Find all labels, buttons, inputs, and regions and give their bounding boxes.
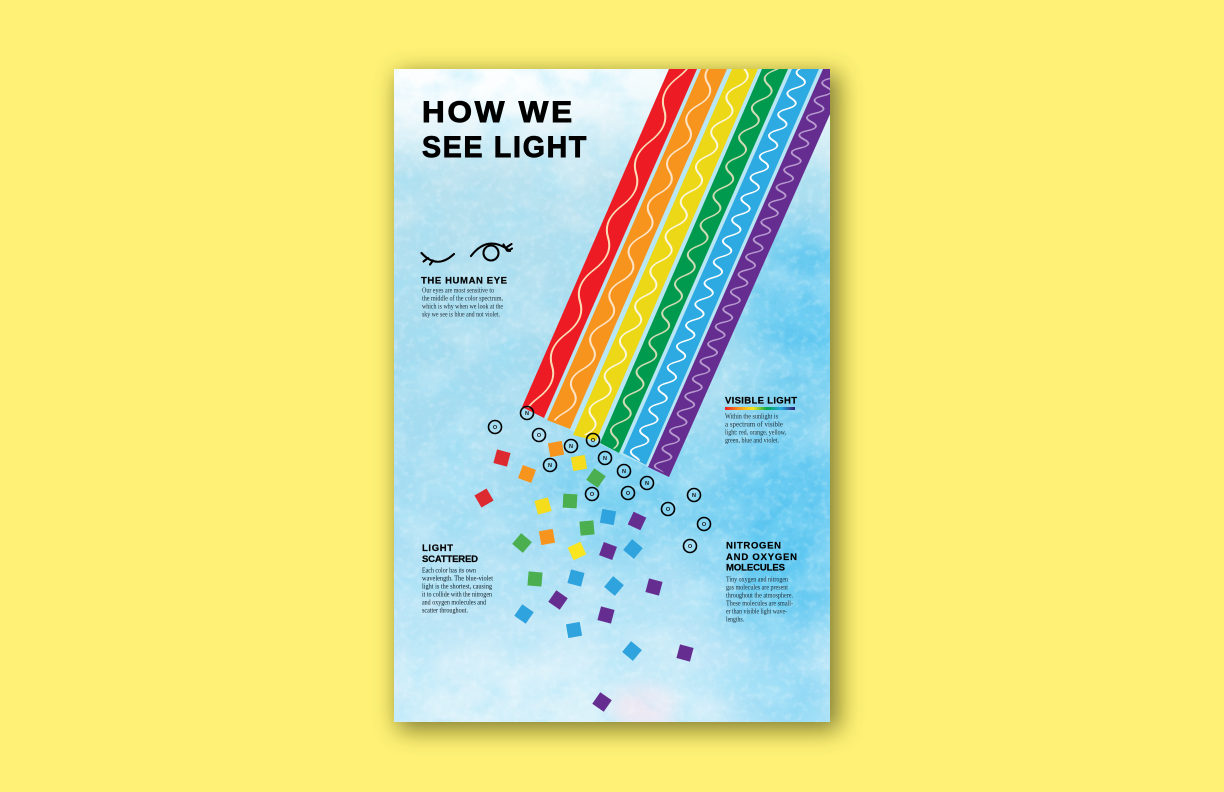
- nitrogen and oxygen molecules: O: [702, 522, 707, 528]
- text block: the human eye: sky we see is blue and not violet.: [422, 310, 500, 318]
- nitrogen and oxygen molecules: O: [493, 425, 498, 431]
- nitrogen and oxygen molecules: N: [622, 469, 626, 475]
- band: blue: [620, 56, 819, 478]
- title: HOW WE: [422, 95, 572, 129]
- text block: nitrogen and oxygen molecules: lengths.: [726, 616, 744, 624]
- nitrogen and oxygen molecules: O: [591, 438, 596, 444]
- text block: visible light: light: red, orange, yellow,: [725, 428, 786, 436]
- nitrogen and oxygen molecules: O: [590, 492, 595, 498]
- text block: nitrogen and oxygen molecules: MOLECULES: [726, 562, 785, 574]
- band: red: [522, 69, 697, 418]
- text block: the human eye: the middle of the color spectrum,: [422, 294, 503, 302]
- icon: open eye: [471, 244, 512, 260]
- text block: visible light: green, blue and violet.: [725, 436, 779, 444]
- text block: nitrogen and oxygen molecules: er than visible light wave-: [726, 608, 788, 616]
- text block: light scattered: scatter throughout.: [422, 606, 468, 614]
- icon: closed eye: [422, 253, 454, 264]
- text block: the human eye: [421, 276, 507, 318]
- page shadow: [398, 74, 839, 730]
- band: yellow: [573, 69, 758, 441]
- nitrogen and oxygen molecules: O: [626, 491, 631, 497]
- text block: nitrogen and oxygen molecules: Tiny oxygen and nitrogen: [726, 576, 788, 584]
- text block: the human eye: THE HUMAN EYE: [421, 276, 507, 286]
- text block: visible light: Within the sunlight is: [725, 412, 778, 420]
- text block: light scattered: and oxygen molecules and: [422, 598, 486, 606]
- nitrogen and oxygen molecules: N: [645, 481, 649, 487]
- title: SEE LIGHT: [422, 131, 586, 164]
- nitrogen and oxygen molecules: N: [692, 493, 696, 499]
- text block: nitrogen and oxygen molecules: These molecules are small-: [726, 600, 794, 608]
- nitrogen and oxygen molecules: O: [688, 544, 693, 550]
- text block: light scattered: it to collide with the nitrogen: [422, 590, 492, 598]
- text block: nitrogen and oxygen molecules: throughout the atmosphere.: [726, 592, 793, 600]
- text block: nitrogen and oxygen molecules: NITROGEN: [726, 540, 781, 552]
- nitrogen and oxygen molecules: O: [537, 433, 542, 439]
- scattered light squares: [474, 441, 694, 712]
- nitrogen and oxygen molecules: N: [548, 463, 552, 469]
- watercolor sky background: [394, 69, 830, 722]
- text block: light scattered: SCATTERED: [422, 554, 478, 565]
- text block: the human eye: which is why when we look at the: [422, 302, 503, 310]
- band: green: [600, 69, 788, 453]
- text block: nitrogen and oxygen molecules: AND OXYGEN: [726, 552, 797, 563]
- nitrogen and oxygen molecules: N: [603, 456, 607, 462]
- band: purple: [648, 69, 830, 477]
- text block: nitrogen and oxygen molecules: [726, 540, 797, 624]
- nitrogen and oxygen molecules: N: [569, 444, 573, 450]
- spectrum bar: [725, 407, 795, 410]
- text block: light scattered: LIGHT: [422, 543, 453, 554]
- text block: visible light: VISIBLE LIGHT: [725, 396, 797, 406]
- nitrogen and oxygen molecules: N: [525, 411, 529, 417]
- text block: light scattered: light is the shortest, causing: [422, 582, 492, 590]
- nitrogen and oxygen molecules: O: [666, 507, 671, 513]
- light blue gaps behind the bands: [544, 69, 830, 477]
- text block: nitrogen and oxygen molecules: gas molecules are present: [726, 584, 788, 592]
- poster: [394, 69, 830, 722]
- text block: visible light: a spectrum of visible: [725, 420, 783, 428]
- title: [422, 95, 586, 164]
- band: orange: [547, 69, 727, 429]
- nitrogen and oxygen molecules: [488, 406, 710, 552]
- text block: light scattered: Each color has its own: [422, 566, 476, 574]
- text block: visible light: [725, 396, 797, 444]
- text block: the human eye: Our eyes are most sensitive to: [422, 286, 494, 294]
- text block: light scattered: wavelength. The blue-violet: [422, 574, 493, 582]
- text block: light scattered: [422, 543, 493, 614]
